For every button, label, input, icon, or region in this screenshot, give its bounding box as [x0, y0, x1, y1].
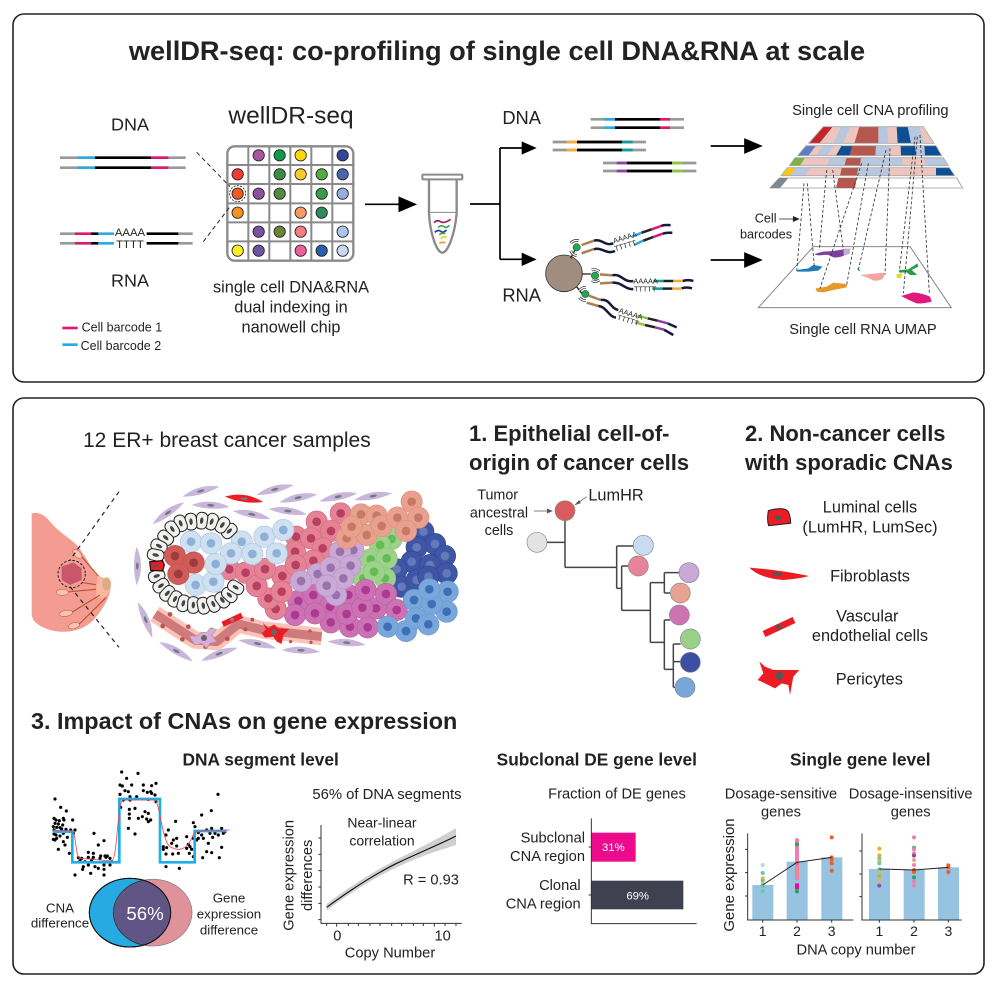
label: Vascular endothelial cells [812, 608, 928, 645]
axis tick labels: 2 [910, 923, 918, 939]
chart: fraction bars: 31% [602, 842, 625, 854]
chart: fraction bars: CNA region [506, 896, 581, 912]
legend: cell barcodes: Cell barcode 2 [81, 339, 161, 353]
cells: salmon [336, 491, 429, 549]
blood vessel [155, 612, 322, 649]
chart: copy number correlation: Gene expression [281, 820, 297, 931]
chart: copy number correlation: correlation [349, 833, 415, 849]
axis label: Gene expression: Gene expression [721, 818, 738, 932]
label: UMAP: Single cell RNA UMAP [789, 322, 937, 338]
heading: Epithelial cell-of-origin: 1. Epithelial cell-of- [469, 421, 669, 446]
section: DNA RNA chip and tube [60, 102, 462, 353]
label: RNA: RNA [111, 271, 149, 291]
heading: Epithelial cell-of-origin [469, 421, 689, 475]
label: Luminal cells: Luminal cells [823, 499, 917, 517]
diagram: RNA strands: TTTT [116, 239, 144, 251]
section: subclonal and single gene levels [497, 750, 973, 958]
chart: copy number correlation: Copy Number [345, 945, 435, 961]
label: Vascular endothelial cells: Vascular [836, 608, 899, 626]
heading: samples: 12 ER+ breast cancer samples [83, 429, 371, 452]
cells: ancestral red [164, 545, 204, 585]
label: Gene expression difference: Gene [213, 891, 245, 906]
cells: light blue [180, 519, 294, 596]
icon: pericyte [758, 662, 799, 695]
axis tick labels: 2 [793, 923, 801, 939]
icon: fibroblast [749, 568, 809, 580]
diagram: tumor microenvironment [134, 481, 458, 664]
cells: epithelial duct [146, 512, 246, 615]
icon: luminal cell [768, 509, 791, 526]
label: Cell barcodes: barcodes [740, 228, 792, 242]
red fibroblast [224, 492, 264, 505]
label: Cell barcodes: Cell [755, 212, 777, 226]
cells: pink [219, 503, 351, 620]
chart: copy number correlation: 0 [333, 929, 341, 945]
label: Tumor ancestral cells: cells [485, 523, 513, 539]
diagram: UMAP plane [758, 247, 951, 308]
heading: Epithelial cell-of-origin: origin of cancer cells [469, 450, 689, 475]
chart: fraction bars: 69% [626, 890, 649, 902]
chart: copy number correlation: 10 [435, 929, 451, 945]
label: Fibroblasts: Fibroblasts [830, 568, 910, 586]
label: CNA difference: CNA [46, 900, 74, 915]
section: DNA segment level [31, 750, 462, 961]
label: RNA: RNA [502, 284, 542, 305]
label: CNA profiling: Single cell CNA profiling [792, 103, 949, 119]
chart: dosage-insensitive [859, 833, 962, 923]
cells: magenta [284, 579, 407, 638]
diagram: DNA reads [553, 119, 696, 171]
arrow: DNA to CNA [711, 139, 761, 153]
chart: fraction bars: Clonal [539, 878, 581, 894]
label: Dosage-insensitive genes: Dosage-insensitive [849, 787, 973, 803]
text: chip caption: dual indexing in [234, 299, 348, 317]
label: wellDR-seq: wellDR-seq [227, 102, 354, 129]
chart: copy number correlation: R = 0.93 [403, 872, 459, 888]
chart title: Fraction of DE genes: Fraction of DE genes [548, 786, 686, 802]
arrow: ancestral cells [534, 509, 552, 513]
heading: impact of CNAs: 3. Impact of CNAs on gene expression [31, 708, 457, 734]
diagram: Venn: 56% [126, 903, 164, 924]
diagram: Venn [89, 878, 192, 947]
text: chip caption: single cell DNA&RNA [213, 279, 369, 297]
axis tick labels [759, 923, 952, 939]
diagram: RNA strands [60, 227, 193, 251]
label: Tumor ancestral cells: ancestral [470, 506, 528, 522]
legend: cell barcodes: Cell barcode 1 [82, 320, 162, 334]
subheading: Single gene level: Single gene level [790, 750, 931, 770]
label: Pericytes: Pericytes [836, 670, 903, 688]
chart title: 56% of DNA segments [312, 787, 462, 803]
heatmap: CNA profile [770, 127, 963, 188]
chart: fraction bars [506, 818, 697, 924]
diagram: RNA bead with oligos: AAAAA [633, 276, 658, 285]
panel: results [13, 398, 984, 974]
label: DNA: DNA [502, 107, 542, 128]
diagram: RNA bead with oligos: TTTTT [634, 284, 657, 293]
icon: endothelial cell [764, 620, 794, 634]
label: CNA difference [31, 900, 89, 931]
arrow: chip to tube [365, 198, 415, 211]
diagram: RNA strands: AAAA [115, 227, 146, 239]
tree: clonal lineage [527, 501, 700, 697]
label: Dosage-sensitive genes [725, 787, 837, 821]
icon: breast [32, 492, 119, 647]
section: sequencing outputs [470, 103, 963, 338]
heading: Non-cancer cells: with sporadic CNAs [744, 450, 953, 475]
heading: Non-cancer cells: 2. Non-cancer cells [745, 421, 946, 446]
label: Luminal cells: (LumHR, LumSec) [802, 519, 938, 537]
heading: Non-cancer cells [744, 421, 953, 475]
fibroblasts [134, 481, 393, 664]
label: Dosage-sensitive genes: genes [761, 805, 801, 821]
text: chip caption: nanowell chip [242, 318, 340, 336]
chart: copy number correlation: Near-linear [347, 815, 417, 831]
axis tick labels: 1 [875, 923, 883, 939]
cells: pericytes and endothelial [189, 615, 289, 648]
diagram: RNA bead with oligos: AAAAA [612, 229, 638, 245]
arrow: split to DNA and RNA [470, 141, 537, 266]
label: Cell barcodes [737, 210, 799, 242]
subheading: Subclonal DE gene level: Subclonal DE gene level [497, 750, 697, 770]
chart: dosage-sensitive [745, 833, 853, 923]
label: LumHR: LumHR [588, 487, 644, 505]
axis label: DNA copy number: DNA copy number [797, 942, 916, 958]
diagram: DNA strands [60, 158, 186, 168]
label: CNA difference: difference [31, 916, 89, 931]
section: tissue illustration [32, 481, 458, 664]
cells: green [353, 528, 402, 589]
label: Dosage-insensitive genes: genes [891, 805, 931, 821]
panel: workflow [13, 14, 984, 382]
subheading: DNA segment level: DNA segment level [183, 750, 339, 770]
label: Luminal cells [802, 499, 938, 537]
chart: copy number correlation: differences [300, 840, 316, 911]
label: Dosage-insensitive genes [849, 787, 973, 821]
diagram: RNA bead with oligos [546, 225, 693, 335]
arrow: RNA to UMAP [711, 253, 761, 267]
label: DNA: DNA [111, 115, 149, 135]
cells: mid blue [377, 579, 458, 642]
label: Vascular endothelial cells: endothelial cells [812, 627, 928, 645]
label: Gene expression difference [197, 891, 261, 937]
section: lineage tree and cell types [470, 487, 938, 697]
chart: fraction bars: Subclonal [521, 831, 585, 847]
label: Dosage-sensitive genes: Dosage-sensitive [725, 787, 837, 803]
label: Tumor ancestral cells: Tumor [477, 487, 518, 503]
axis tick labels: 3 [944, 923, 952, 939]
label: Gene expression difference: expression [197, 907, 261, 922]
text: chip caption [213, 279, 369, 336]
legend: cell barcodes [62, 320, 162, 353]
label: Gene expression difference: difference [200, 922, 258, 937]
dashed lines: cell barcode links [797, 135, 929, 293]
icon: tube [422, 175, 462, 253]
chart: fraction bars: CNA region [510, 849, 585, 865]
diagram: RNA bead with oligos: TTTTT [616, 313, 641, 328]
axis tick labels: 1 [759, 923, 767, 939]
axis tick labels: 3 [828, 923, 836, 939]
diagram: RNA bead with oligos: TTTTT [613, 238, 638, 253]
label: Tumor ancestral cells [470, 487, 528, 539]
chart: copy-number scatter [53, 772, 229, 875]
cells: lilac [290, 539, 364, 606]
diagram: RNA bead with oligos: AAAAA [618, 306, 644, 322]
cells: dark blue [386, 521, 457, 597]
title: wellDR-seq: co-profiling of single cell DNA&RNA at scale [128, 35, 865, 66]
diagram: nanowell chip [197, 146, 353, 261]
chart: copy number correlation [281, 815, 462, 961]
arrow: LumHR [575, 497, 587, 505]
